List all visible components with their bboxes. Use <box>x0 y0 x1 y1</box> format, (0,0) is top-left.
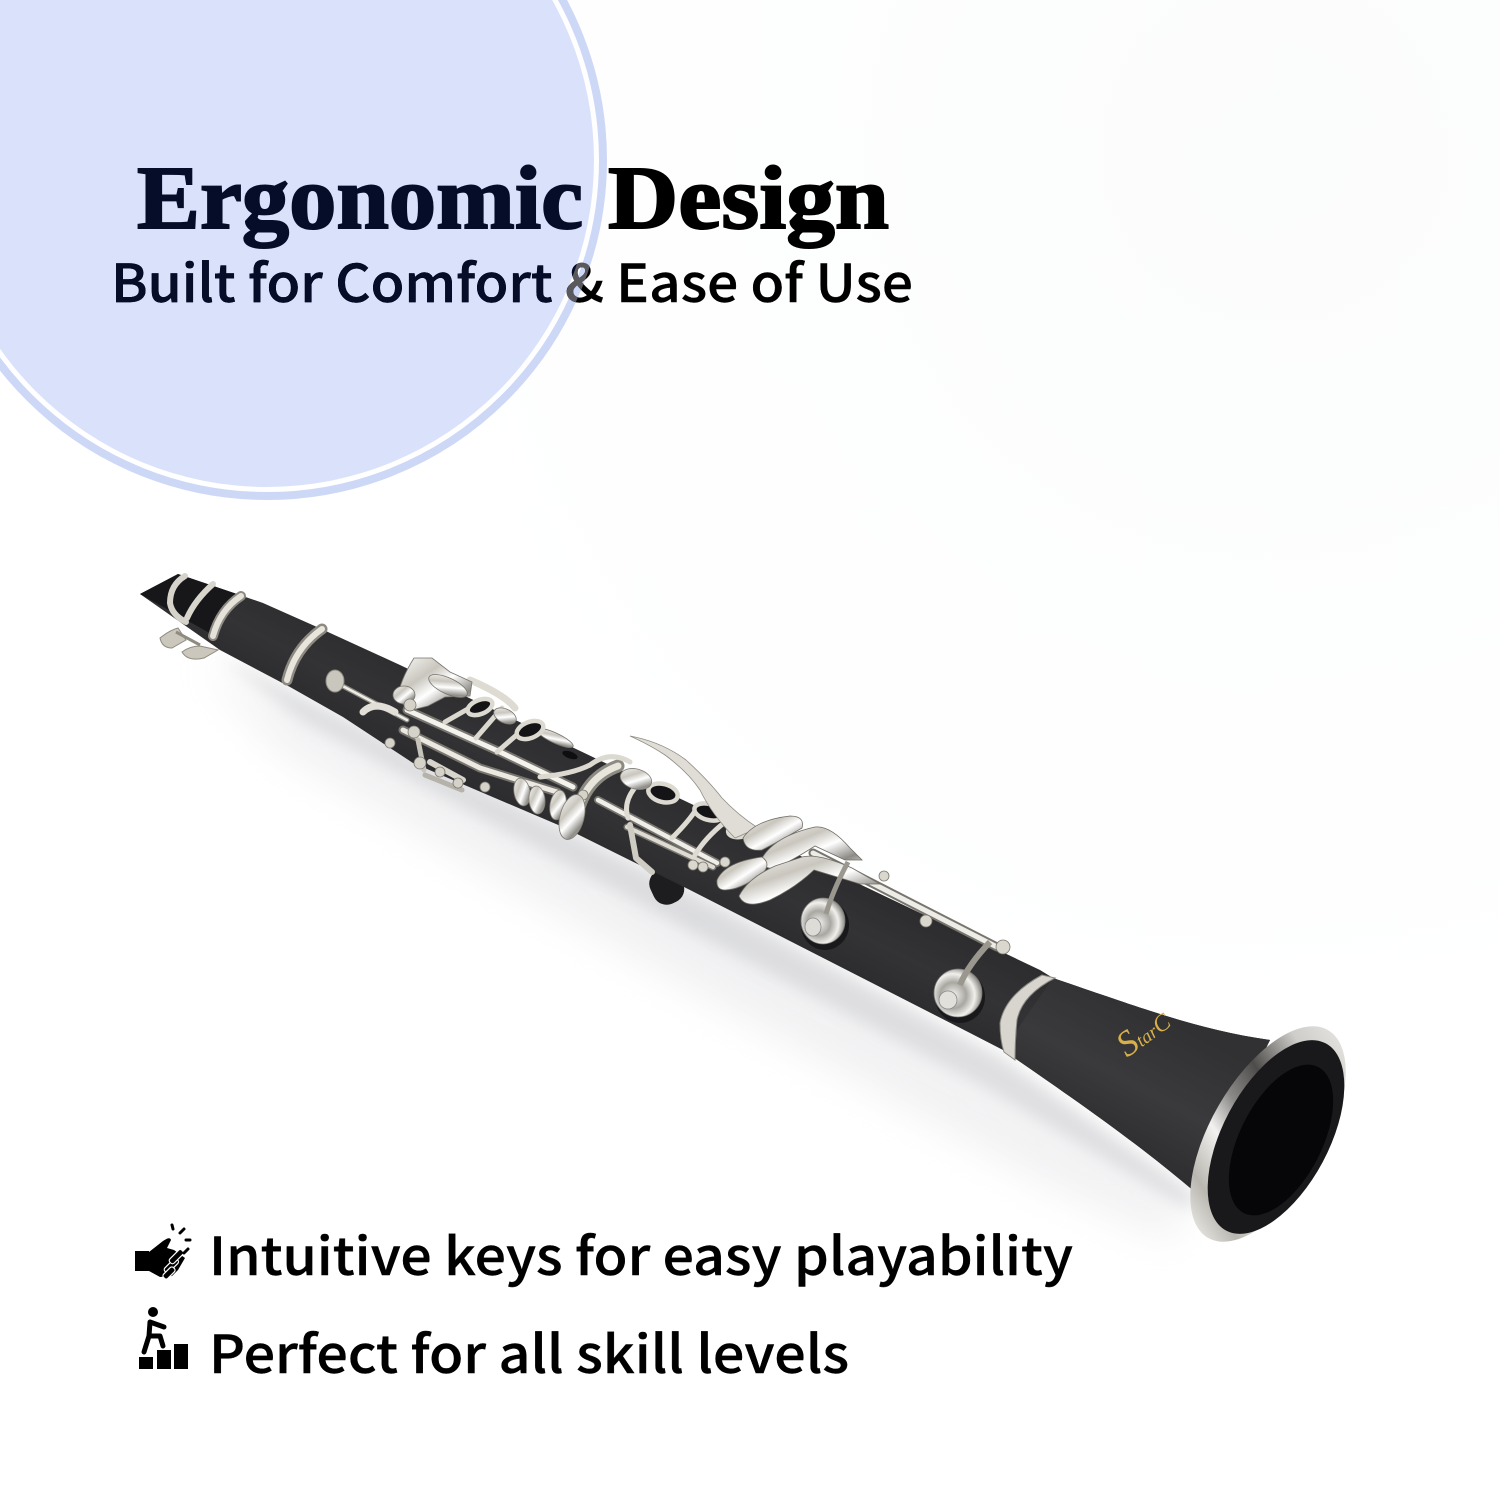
thumb disc one <box>801 862 849 950</box>
bell flare shading <box>1003 978 1270 1192</box>
glossy barrel tip <box>140 574 240 635</box>
upper joint key mechanism <box>337 680 630 792</box>
title <box>137 149 889 248</box>
trill post and rods <box>688 857 1010 954</box>
key cup at middle ring <box>618 765 654 793</box>
decorative corner circle <box>0 0 603 496</box>
clarinet <box>140 574 1377 1266</box>
bullet text one: Intuitive keys for easy playability <box>209 1215 1073 1290</box>
lower tone holes <box>646 780 753 839</box>
long curved lever <box>630 736 758 838</box>
bullet text two: Perfect for all skill levels <box>209 1313 849 1388</box>
icon: person climbing steps <box>139 1307 188 1369</box>
thumb rest knob <box>645 863 689 909</box>
brand logo: StarC <box>1108 998 1178 1064</box>
bullet: skill levels <box>139 1307 849 1388</box>
open tone holes <box>465 696 546 743</box>
register feet under barrel <box>160 628 218 659</box>
subtitle: Built for Comfort & Ease of Use <box>111 242 913 317</box>
register key disc <box>326 670 344 692</box>
subtitle: Built for Comfort & Ease of Use <box>111 242 913 317</box>
clarinet shadow <box>200 655 1195 1240</box>
thumb disc two <box>934 942 990 1023</box>
large finger paddles <box>717 816 880 904</box>
bell ring band <box>1000 975 1055 1060</box>
bullet: intuitive keys <box>135 1215 1073 1290</box>
clarinet body <box>140 574 1270 1192</box>
title: Ergonomic <box>137 149 583 248</box>
pinky spatula keys <box>512 777 590 842</box>
side post knobs <box>385 699 588 800</box>
title: Design <box>608 149 889 248</box>
subtitle <box>116 260 911 303</box>
top key cluster <box>393 658 575 751</box>
speaker hole <box>561 749 579 761</box>
subtitle: Built for Comfort & Ease of Use <box>111 242 913 317</box>
lower joint rods <box>598 782 997 947</box>
tenon rings <box>170 576 618 815</box>
bell opening <box>1159 1002 1377 1266</box>
icon: hand pressing keys <box>135 1225 190 1280</box>
